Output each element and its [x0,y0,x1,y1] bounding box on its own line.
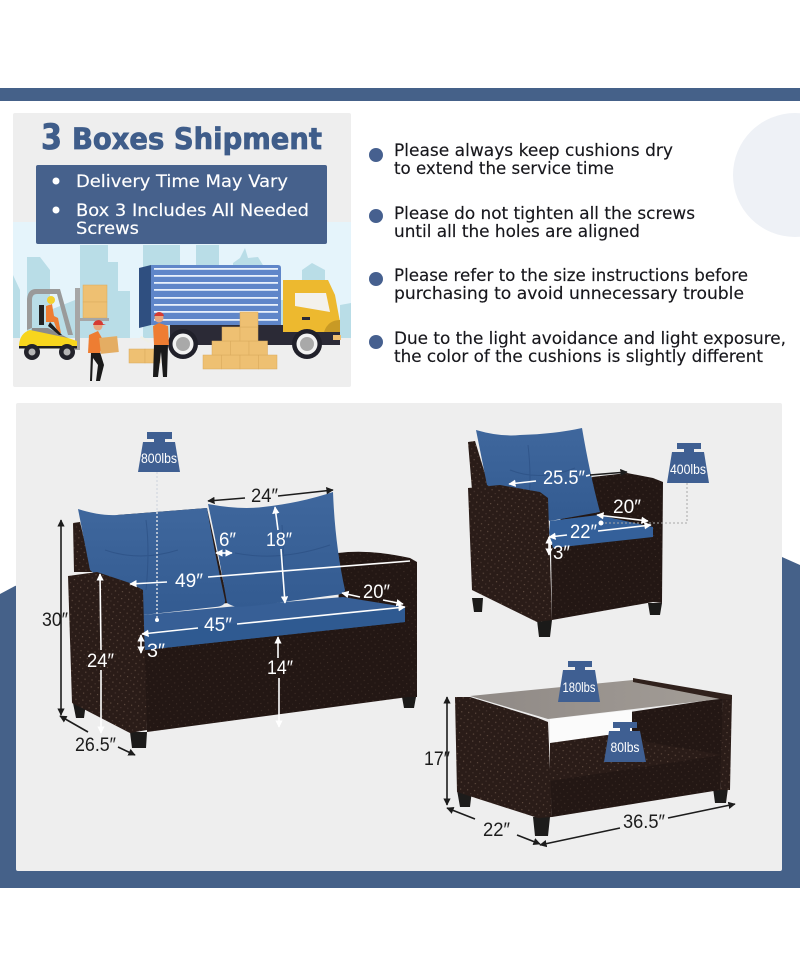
chair [468,428,663,637]
panel: furniture dimensions [16,403,782,871]
chair cushions [476,428,653,548]
tip 1 [369,141,673,178]
tip 2: until all the holes are aligned [394,222,640,241]
top band [0,88,800,101]
illustration: truck [139,265,341,359]
tip 1: Please always keep cushions dry [394,141,673,160]
blue backdrop [0,470,800,888]
sofa cushions [78,492,405,650]
sofa dimension labels: 20″ [363,582,390,603]
chair dimension labels [543,468,641,564]
chair dimension labels: 22″ [570,522,597,543]
load lines [155,472,687,622]
tip 1: to extend the service time [394,159,614,178]
sofa dimension labels: 6″ [219,530,236,551]
weight icon: chair 400lbs [667,443,709,483]
sofa frame [73,508,417,748]
callout: delivery notes: Screws [76,219,139,239]
panel: care tips [369,141,786,366]
weight icon: shelf 80lbs: 80lbs [610,739,640,755]
table dimension labels: 36.5″ [623,812,665,833]
tip 4 [369,329,786,366]
illustration: city sky [13,222,351,338]
chair left arm [468,485,552,622]
decorative circle top right [733,113,800,237]
sofa dimension labels: 18″ [266,530,292,551]
table frame [455,678,732,836]
chair frame [468,441,663,637]
chair dimension labels: 3″ [553,543,570,564]
illustration: stacked boxes [129,312,277,369]
panel: shipment [13,113,351,387]
sofa dimension arrows [60,490,410,755]
tip 2 [369,204,695,241]
callout: delivery notes: Box 3 Includes All Needed [76,201,309,221]
tip 4: Due to the light avoidance and light exposure, [394,329,786,348]
illustration: forklift [19,285,109,360]
sofa dimension labels: 14″ [267,658,293,679]
heading: 3 [41,118,62,158]
table dimension arrows [447,697,735,845]
heading: Boxes Shipment [72,122,322,156]
sofa dimension labels: 3″ [147,641,165,662]
sofa dimension labels: 24″ [87,651,114,672]
table dimension labels: 17″ [424,749,450,770]
sofa dimension labels: 49″ [175,571,203,592]
sofa dimension labels [42,486,390,756]
weight icon: table 180lbs: 180lbs [562,679,596,695]
weight icon: chair 400lbs: 400lbs [670,461,706,477]
tip 4: the color of the cushions is slightly different [394,347,764,366]
tip 3 [369,266,748,303]
illustration: worker with clipboard [140,312,169,377]
table [455,678,732,836]
sofa left arm [68,572,147,733]
weight icon: sofa 800lbs: 800lbs [141,450,177,466]
chair dimension arrows [509,472,651,555]
sofa dimension labels: 30″ [42,610,68,631]
sofa dimension labels: 24″ [251,486,278,507]
sofa [68,492,417,748]
tip 2: Please do not tighten all the screws [394,204,695,223]
table dimension labels: 22″ [483,820,510,841]
weight icon: table 180lbs [558,661,600,702]
tip 3: purchasing to avoid unnecessary trouble [394,284,744,303]
sofa dimension labels: 45″ [204,615,232,636]
callout: delivery notes [36,165,327,244]
weight icon: shelf 80lbs [604,722,646,762]
tip 3: Please refer to the size instructions before [394,266,748,285]
callout: delivery notes: Delivery Time May Vary [76,172,288,192]
illustration: worker carrying box [88,320,119,381]
chair dimension labels: 20″ [613,497,641,518]
sofa dimension labels: 26.5″ [75,735,116,756]
weight icon: sofa 800lbs [138,432,180,472]
table dimension labels [424,749,665,841]
chair dimension labels: 25.5″ [543,468,585,489]
